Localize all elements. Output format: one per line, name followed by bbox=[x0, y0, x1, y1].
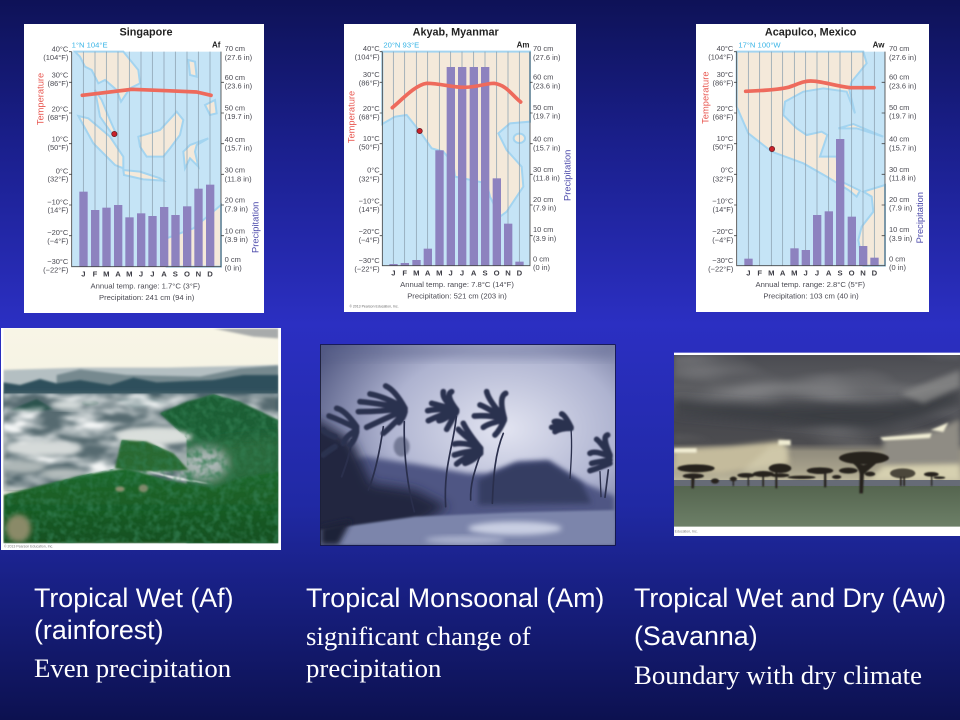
caption: Tropical Wet bbox=[34, 583, 234, 683]
precipitation axis labels bbox=[225, 44, 253, 273]
map: Mexico and Caribbean bbox=[737, 52, 885, 266]
temperature axis labels: 40°C bbox=[717, 44, 734, 53]
precipitation bars bbox=[744, 139, 879, 266]
climate summary bbox=[91, 282, 201, 302]
caption: Tropical Monsoonal: precipitation bbox=[306, 653, 441, 683]
precipitation axis labels: (7.9 in) bbox=[533, 204, 557, 213]
precipitation axis labels: (23.6 in) bbox=[225, 81, 253, 90]
precipitation axis labels: 30 cm bbox=[889, 165, 909, 174]
month labels: M bbox=[768, 268, 775, 277]
axis title: precipitation: Precipitation bbox=[250, 202, 260, 253]
temperature axis labels: 20°C bbox=[363, 104, 380, 113]
precipitation axis labels: 60 cm bbox=[225, 73, 245, 82]
month labels: O bbox=[849, 268, 855, 277]
month labels: D bbox=[872, 268, 878, 277]
temperature axis labels: 0°C bbox=[56, 166, 69, 175]
month labels: S bbox=[173, 269, 178, 278]
station marker bbox=[112, 131, 117, 137]
map: Southeast Asia bbox=[75, 52, 221, 267]
precipitation axis labels bbox=[533, 44, 561, 272]
month labels: F bbox=[93, 269, 98, 278]
climate code: Af bbox=[212, 40, 221, 49]
credit: Education, Inc. bbox=[675, 530, 698, 534]
caption: Tropical Wet and Dry: Boundary with dry climate bbox=[634, 660, 922, 690]
month grid lines bbox=[83, 52, 210, 267]
precipitation axis labels: 0 cm bbox=[225, 255, 241, 264]
climate summary: Precipitation: 103 cm (40 in) bbox=[763, 292, 859, 301]
coordinates: 17°N 100°W bbox=[738, 40, 781, 49]
precipitation axis labels: 50 cm bbox=[533, 103, 553, 112]
axis title: temperature: Temperature bbox=[35, 73, 45, 125]
temperature axis labels: (104°F) bbox=[708, 53, 734, 62]
precipitation axis labels: (7.9 in) bbox=[225, 204, 248, 213]
precipitation axis labels: 40 cm bbox=[225, 135, 245, 144]
temperature axis labels: 10°C bbox=[717, 134, 734, 143]
temperature axis labels: (−4°F) bbox=[712, 236, 734, 245]
climate code: Aw bbox=[873, 40, 885, 49]
temperature axis labels: (68°F) bbox=[359, 113, 380, 122]
month labels: N bbox=[196, 269, 202, 278]
temperature axis labels: 10°C bbox=[52, 135, 69, 144]
precipitation axis labels: 70 cm bbox=[889, 44, 909, 53]
temperature axis labels: (14°F) bbox=[359, 205, 380, 214]
precipitation axis labels: 60 cm bbox=[889, 73, 909, 82]
precipitation axis labels: 60 cm bbox=[533, 73, 553, 82]
temperature axis labels: (86°F) bbox=[359, 79, 380, 88]
climate summary bbox=[756, 280, 866, 301]
month labels: O bbox=[494, 268, 500, 277]
precipitation axis labels: (3.9 in) bbox=[889, 234, 913, 243]
caption: Tropical Wet: Tropical Wet (Af) bbox=[34, 583, 234, 613]
axis title: temperature: Temperature bbox=[347, 91, 357, 143]
station marker bbox=[417, 128, 422, 134]
month labels: F bbox=[402, 268, 407, 277]
caption: Tropical Wet and Dry: (Savanna) bbox=[634, 621, 758, 651]
temperature axis labels: −10°C bbox=[47, 197, 69, 206]
precipitation axis labels: (0 in) bbox=[889, 263, 907, 272]
precipitation axis labels: (0 in) bbox=[533, 263, 551, 272]
precipitation axis labels: (0 in) bbox=[225, 264, 242, 273]
month labels bbox=[81, 269, 213, 278]
month labels: M bbox=[436, 268, 443, 277]
precipitation axis labels: 40 cm bbox=[533, 135, 553, 144]
month labels: A bbox=[471, 268, 477, 277]
month labels: A bbox=[161, 269, 167, 278]
month labels: S bbox=[482, 268, 488, 277]
precipitation axis labels: (11.8 in) bbox=[889, 174, 916, 183]
climate summary: Annual temp. range: 7.8°C (14°F) bbox=[400, 280, 514, 289]
month labels: J bbox=[391, 268, 395, 277]
temperature axis labels: (−4°F) bbox=[47, 236, 69, 245]
palm fronds bbox=[323, 386, 610, 471]
axis title: precipitation: Precipitation bbox=[915, 192, 925, 243]
temperature axis labels: (14°F) bbox=[712, 205, 734, 214]
precipitation axis labels: (7.9 in) bbox=[889, 204, 913, 213]
month labels: M bbox=[103, 269, 110, 278]
temperature axis labels: −30°C bbox=[47, 257, 69, 266]
precipitation axis labels: (11.8 in) bbox=[533, 174, 560, 183]
month labels: J bbox=[449, 268, 453, 277]
month labels: J bbox=[139, 269, 143, 278]
axis title: precipitation: Precipitation bbox=[562, 150, 572, 201]
month grid lines bbox=[393, 52, 519, 266]
temperature axis labels: −20°C bbox=[359, 227, 380, 236]
axis title: temperature: Temperature bbox=[700, 71, 710, 124]
climate summary: Precipitation: 521 cm (203 in) bbox=[407, 292, 507, 301]
month labels: D bbox=[517, 268, 523, 277]
temperature axis labels: 0°C bbox=[367, 166, 380, 175]
temperature axis labels: 30°C bbox=[363, 70, 380, 79]
temperature line bbox=[392, 83, 521, 108]
month labels: O bbox=[184, 269, 190, 278]
precipitation axis labels: (3.9 in) bbox=[225, 235, 248, 244]
caption: Tropical Monsoonal bbox=[306, 583, 604, 683]
precipitation axis labels: 0 cm bbox=[533, 254, 549, 263]
chart title: Singapore bbox=[120, 27, 172, 39]
temperature axis labels: −20°C bbox=[47, 228, 69, 237]
temperature axis labels: 20°C bbox=[52, 105, 69, 114]
precipitation axis labels: (19.7 in) bbox=[225, 112, 253, 121]
temperature axis labels: (−4°F) bbox=[359, 236, 380, 245]
temperature line bbox=[82, 89, 211, 95]
precipitation axis labels: 10 cm bbox=[533, 225, 553, 234]
precipitation axis labels: (11.8 in) bbox=[225, 174, 252, 183]
precipitation axis labels: 20 cm bbox=[533, 195, 553, 204]
precipitation axis labels: 30 cm bbox=[533, 165, 553, 174]
precipitation axis labels: (23.6 in) bbox=[889, 81, 917, 90]
climate summary: Annual temp. range: 2.8°C (5°F) bbox=[756, 280, 866, 289]
month labels: A bbox=[780, 268, 786, 277]
axes bbox=[734, 52, 885, 266]
temperature axis labels: (−22°F) bbox=[354, 265, 380, 274]
temperature axis labels: (32°F) bbox=[359, 174, 380, 183]
photo: palms in a monsoon storm bbox=[305, 344, 616, 547]
month labels: J bbox=[804, 268, 808, 277]
month labels: M bbox=[791, 268, 798, 277]
temperature line bbox=[746, 81, 874, 91]
precipitation axis labels: (15.7 in) bbox=[225, 144, 253, 153]
precipitation axis labels: (19.7 in) bbox=[533, 112, 561, 121]
panel: Singapore climograph bbox=[24, 24, 264, 313]
photo: rainforest with mist bbox=[1, 328, 281, 550]
map: Bay of Bengal coast bbox=[382, 52, 530, 217]
station marker bbox=[769, 146, 775, 152]
precipitation axis labels: 50 cm bbox=[889, 103, 909, 112]
month labels: A bbox=[826, 268, 832, 277]
precipitation bars bbox=[79, 185, 214, 267]
precipitation bars bbox=[389, 67, 524, 266]
precipitation axis labels: (3.9 in) bbox=[533, 234, 557, 243]
temperature axis labels: −20°C bbox=[712, 227, 734, 236]
precipitation axis labels: (15.7 in) bbox=[889, 143, 917, 152]
temperature axis labels: (14°F) bbox=[47, 206, 69, 215]
precipitation axis labels: (15.7 in) bbox=[533, 143, 561, 152]
temperature axis labels bbox=[43, 45, 69, 275]
temperature axis labels: −10°C bbox=[712, 196, 734, 205]
precipitation axis labels: 40 cm bbox=[889, 135, 909, 144]
climate summary bbox=[400, 280, 514, 301]
temperature axis labels: 40°C bbox=[363, 44, 380, 53]
month grid lines bbox=[748, 52, 874, 266]
temperature axis labels: (104°F) bbox=[355, 53, 380, 62]
panel: Acapulco climograph bbox=[696, 24, 929, 312]
precipitation axis labels: (19.7 in) bbox=[889, 112, 917, 121]
temperature axis labels: 10°C bbox=[363, 134, 380, 143]
precipitation axis labels: 70 cm bbox=[225, 44, 245, 53]
month labels: J bbox=[81, 269, 85, 278]
month labels bbox=[391, 268, 523, 277]
copyright: © 2013 Pearson Education, Inc. bbox=[4, 544, 53, 548]
caption: Tropical Wet and Dry: Tropical Wet and Dry (Aw) bbox=[634, 583, 946, 613]
temperature axis labels: (50°F) bbox=[359, 143, 380, 152]
temperature axis labels: 40°C bbox=[52, 45, 69, 54]
temperature axis labels: 0°C bbox=[721, 166, 734, 175]
temperature axis labels: 30°C bbox=[52, 71, 69, 80]
precipitation axis labels: (27.6 in) bbox=[533, 53, 561, 62]
caption: Tropical Monsoonal: significant change of bbox=[306, 621, 531, 651]
month labels: F bbox=[757, 268, 762, 277]
copyright: © 2013 Pearson Education, Inc. bbox=[349, 304, 399, 308]
temperature axis labels: (50°F) bbox=[47, 143, 69, 152]
month labels: J bbox=[150, 269, 154, 278]
month labels: A bbox=[425, 268, 431, 277]
coordinates: 1°N 104°E bbox=[72, 40, 108, 49]
temperature axis labels: 20°C bbox=[717, 104, 734, 113]
precipitation axis labels: 50 cm bbox=[225, 104, 245, 113]
temperature axis labels: (104°F) bbox=[43, 53, 69, 62]
coordinates: 20°N 93°E bbox=[383, 40, 419, 49]
precipitation axis labels: 0 cm bbox=[889, 254, 905, 263]
precipitation axis labels: 20 cm bbox=[225, 196, 245, 205]
month labels bbox=[746, 268, 878, 277]
temperature axis labels: (−22°F) bbox=[43, 266, 69, 275]
temperature axis labels: −30°C bbox=[359, 256, 380, 265]
chart title: Acapulco, Mexico bbox=[765, 26, 857, 38]
temperature axis labels: (50°F) bbox=[712, 143, 734, 152]
month labels: A bbox=[115, 269, 121, 278]
month labels: N bbox=[505, 268, 511, 277]
temperature axis labels: 30°C bbox=[717, 70, 734, 79]
climate code: Am bbox=[517, 40, 530, 49]
precipitation axis labels: (27.6 in) bbox=[889, 53, 917, 62]
temperature axis labels: (68°F) bbox=[712, 113, 734, 122]
month labels: J bbox=[815, 268, 819, 277]
temperature axis labels bbox=[708, 44, 734, 274]
axes bbox=[69, 52, 224, 267]
month labels: J bbox=[460, 268, 464, 277]
temperature axis labels: (86°F) bbox=[712, 79, 734, 88]
precipitation axis labels: 70 cm bbox=[533, 44, 553, 53]
precipitation axis labels: (23.6 in) bbox=[533, 81, 561, 90]
axes bbox=[380, 52, 533, 266]
month labels: M bbox=[413, 268, 420, 277]
caption: Tropical Wet: (rainforest) bbox=[34, 615, 164, 645]
precipitation axis labels: (27.6 in) bbox=[225, 53, 253, 62]
panel: Akyab climograph bbox=[344, 24, 576, 312]
temperature axis labels: −30°C bbox=[712, 256, 734, 265]
photo: savanna with acacia trees bbox=[674, 353, 960, 536]
temperature axis labels: (86°F) bbox=[47, 79, 69, 88]
precipitation axis labels: 10 cm bbox=[889, 225, 909, 234]
caption: Tropical Wet and Dry bbox=[634, 583, 946, 690]
climate summary: Annual temp. range: 1.7°C (3°F) bbox=[91, 282, 201, 291]
temperature axis labels: (−22°F) bbox=[708, 265, 734, 274]
climate summary: Precipitation: 241 cm (94 in) bbox=[99, 293, 195, 302]
chart title: Akyab, Myanmar bbox=[413, 26, 499, 38]
month labels: J bbox=[746, 268, 750, 277]
temperature axis labels bbox=[354, 44, 380, 274]
caption: Tropical Monsoonal: Tropical Monsoonal (Am) bbox=[306, 583, 604, 613]
precipitation axis labels: 10 cm bbox=[225, 226, 245, 235]
temperature axis labels: (32°F) bbox=[712, 174, 734, 183]
temperature axis labels: (32°F) bbox=[47, 175, 69, 184]
precipitation axis labels bbox=[889, 44, 917, 272]
temperature axis labels: (68°F) bbox=[47, 113, 69, 122]
precipitation axis labels: 20 cm bbox=[889, 195, 909, 204]
caption: Tropical Wet: Even precipitation bbox=[34, 653, 231, 683]
precipitation axis labels: 30 cm bbox=[225, 166, 245, 175]
month labels: N bbox=[860, 268, 866, 277]
month labels: D bbox=[207, 269, 213, 278]
temperature axis labels: −10°C bbox=[359, 196, 380, 205]
month labels: M bbox=[126, 269, 133, 278]
month labels: S bbox=[837, 268, 843, 277]
